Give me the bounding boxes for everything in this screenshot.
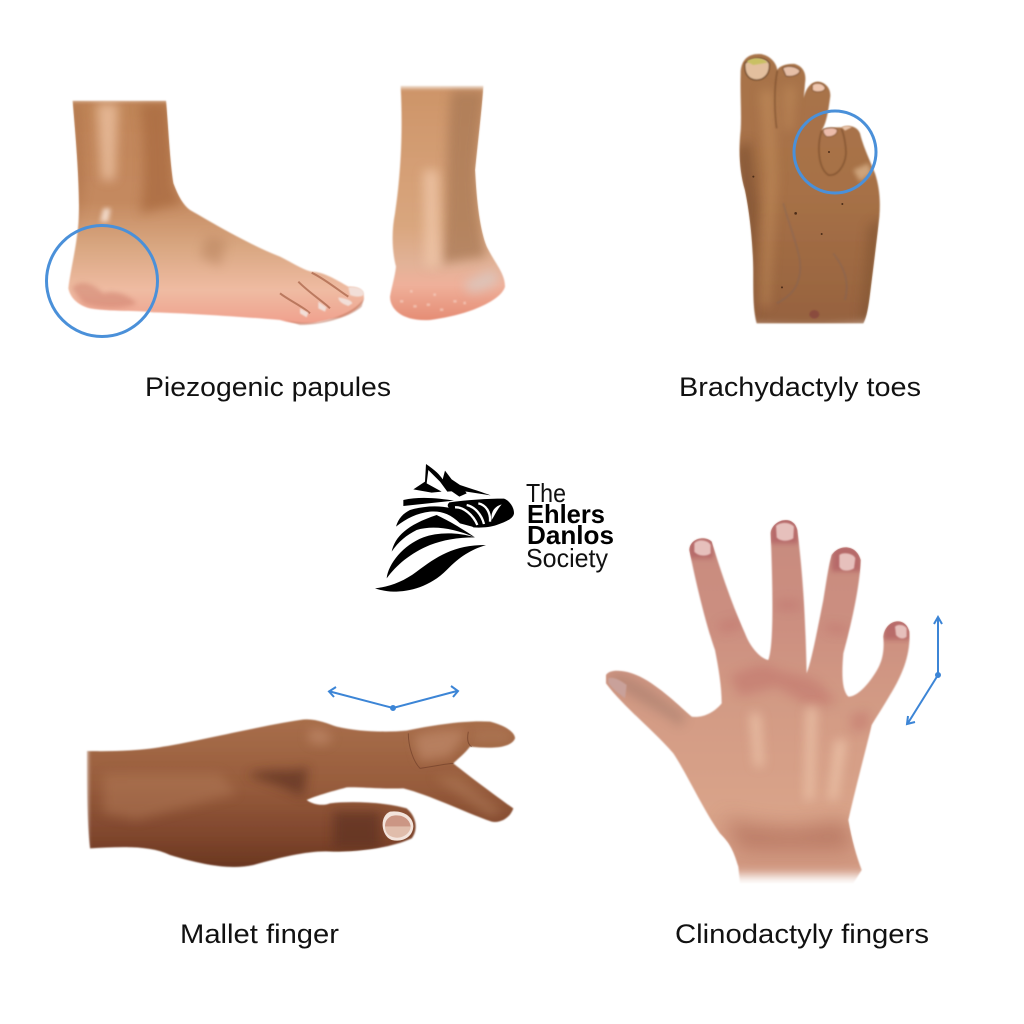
illustration: foot from above with short toes [737, 54, 883, 347]
fingernails [608, 523, 907, 698]
toes detail [280, 273, 364, 325]
arrow: mallet finger angle [329, 686, 458, 710]
logo wordmark: Ehlers [527, 499, 605, 529]
illustration: side view of foot [60, 88, 364, 325]
label: Mallet finger: Mallet finger [180, 919, 339, 949]
arrow: clinodactyly angle [907, 617, 942, 724]
logo wordmark: The [526, 478, 566, 508]
label: Piezogenic papules: Piezogenic papules [145, 372, 391, 402]
nails [745, 58, 769, 80]
illustration: mallet finger hand [73, 719, 515, 867]
label: Brachydactyly toes: Brachydactyly toes [679, 372, 921, 402]
logo wordmark [526, 478, 614, 573]
logo wordmark: Society [526, 543, 608, 573]
circle highlight: heel [46, 226, 158, 336]
leg top fade [60, 88, 180, 100]
logo: The Ehlers Danlos Society [375, 464, 614, 592]
label: Clinodactyly fingers: Clinodactyly fingers [675, 919, 929, 949]
circle highlight: toes [794, 111, 876, 193]
logo icon: zebra head [375, 464, 514, 592]
illustration: clinodactyly hand [606, 517, 910, 903]
toe creases [775, 71, 846, 175]
illustration: back view of heel [390, 75, 505, 320]
logo wordmark: Danlos [527, 520, 614, 550]
